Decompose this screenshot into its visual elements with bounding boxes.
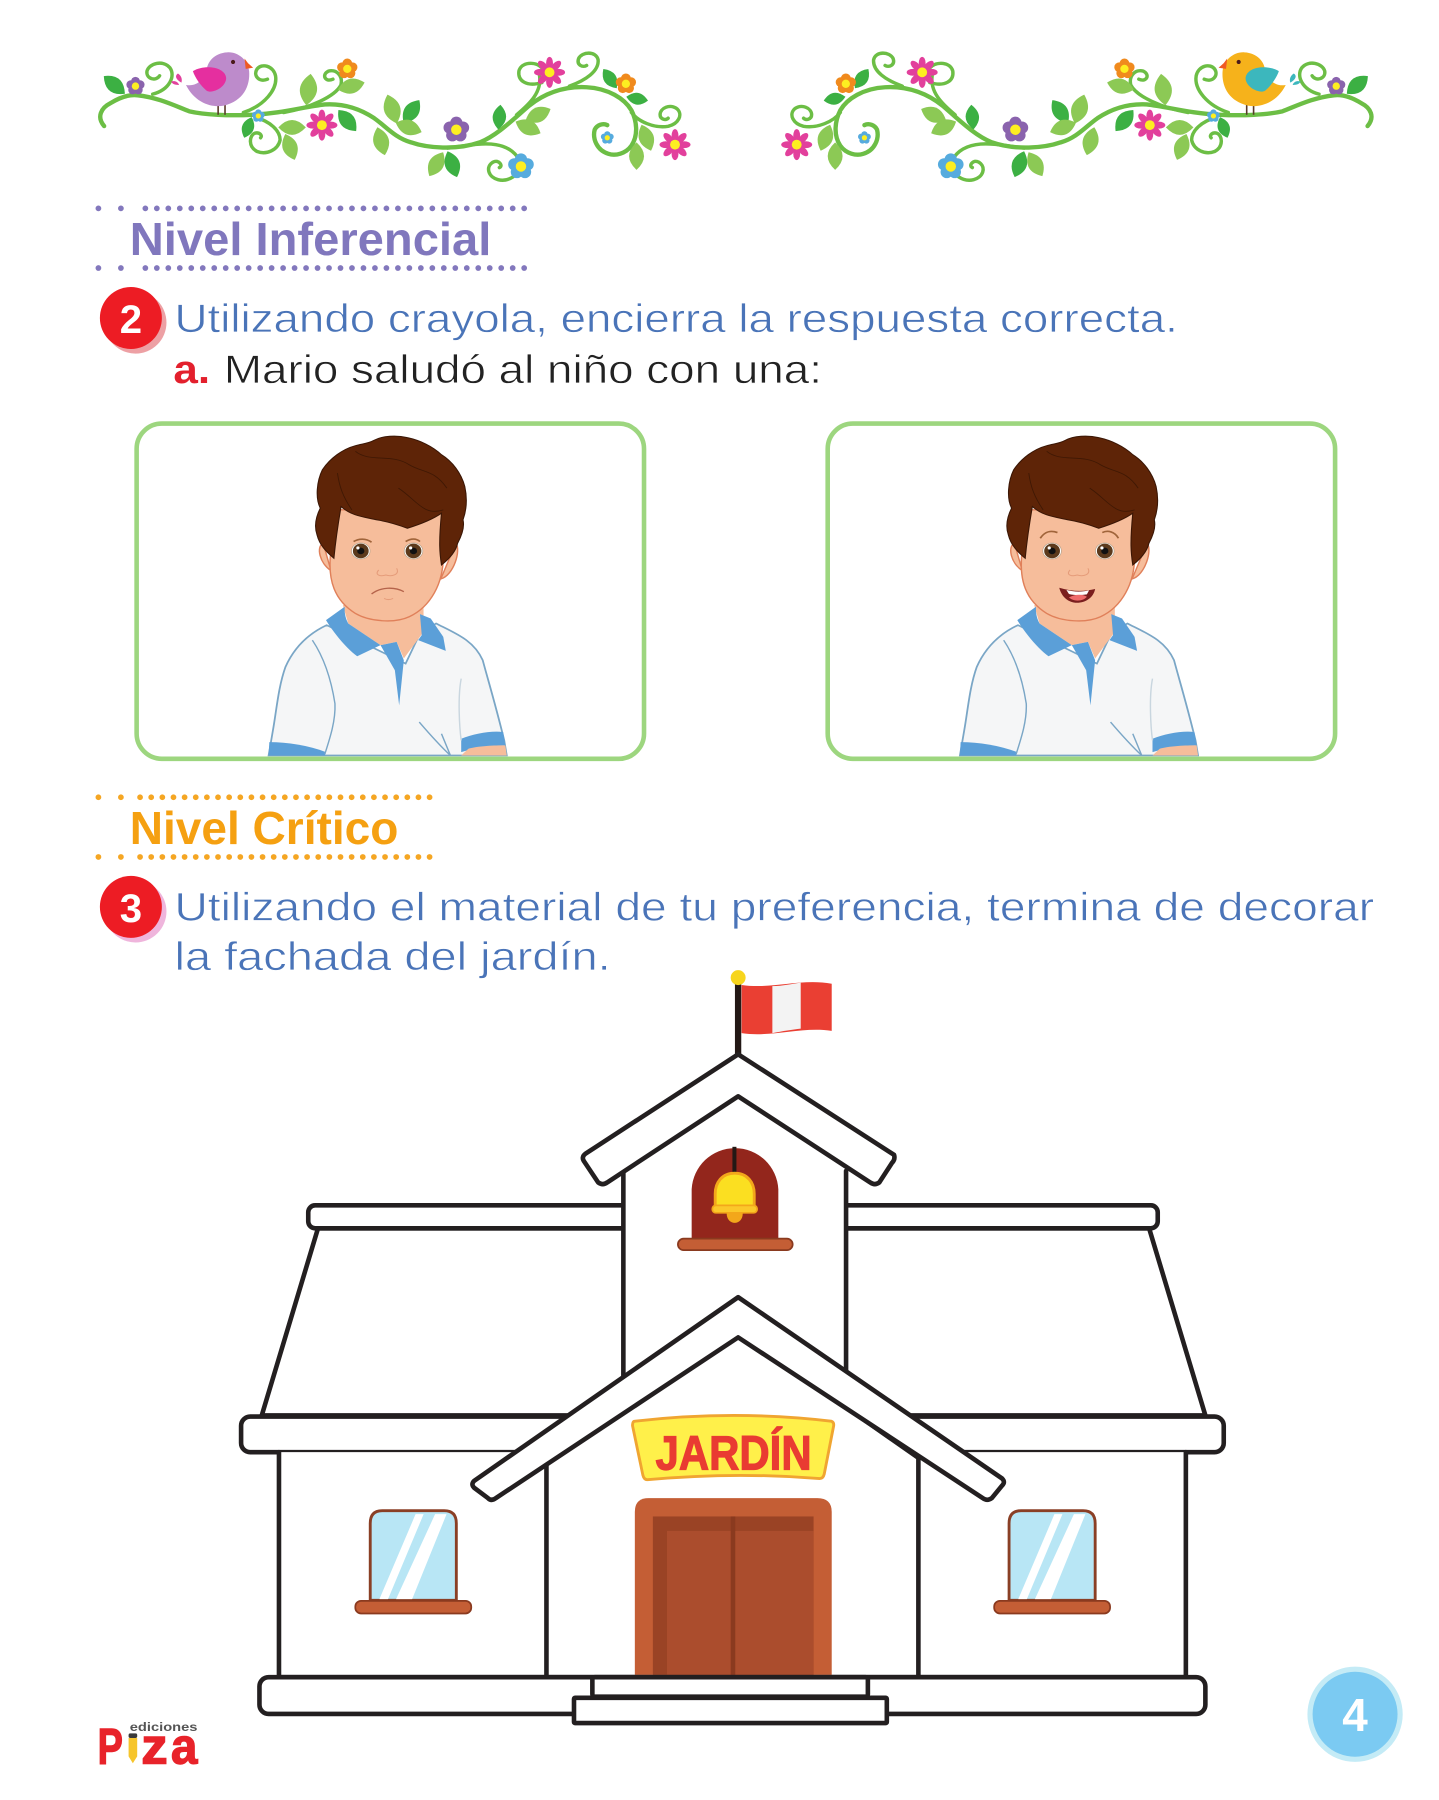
section heading: Nivel Crítico: Nivel Crítico (130, 802, 398, 854)
instruction: question 2: Utilizando crayola, encierra la respuesta correcta. (175, 297, 1178, 341)
badge: number 2: 2 (120, 297, 142, 342)
central facade (546, 1332, 918, 1677)
panel: happy boy option (828, 424, 1335, 759)
base and steps (259, 1677, 1205, 1723)
tower roof (583, 1054, 894, 1184)
logo: ediciones Piza (98, 1717, 198, 1774)
section heading: Nivel Crítico (98, 797, 434, 857)
tower (623, 1148, 846, 1395)
tower walls (623, 1171, 846, 1395)
instruction: question 3: la fachada del jardín. (175, 935, 611, 979)
left window (355, 1511, 471, 1613)
badge: number 2 (100, 287, 166, 354)
instruction: question 3: Utilizando el material de tu preferencia, termina de decorar (175, 886, 1374, 930)
logo: ediciones Piza: ediciones (130, 1720, 198, 1734)
decoration: left floral vine with purple bird (99, 52, 691, 180)
badge: number 3 (100, 876, 166, 942)
bell alcove (678, 1147, 793, 1250)
logo: ediciones Piza: z (141, 1717, 168, 1774)
main gable roof (472, 1297, 1004, 1500)
icon: purple bird (171, 52, 253, 115)
decoration: right floral vine with yellow bird (781, 52, 1373, 180)
right window (994, 1511, 1110, 1613)
lower eave (241, 1417, 1224, 1452)
badge: number 3: 3 (120, 886, 142, 931)
flag (731, 970, 832, 1055)
question a: Mario saludó: Mario saludó al niño con una: (224, 348, 822, 392)
page number badge: 4 (1342, 1689, 1368, 1741)
question a: Mario saludó: a. (173, 348, 210, 392)
instruction: question 3 (175, 886, 1374, 979)
side walls (279, 1452, 1186, 1677)
icon: pencil as letter i (129, 1733, 137, 1763)
illustration: smiling boy (960, 436, 1198, 755)
page number badge (1307, 1667, 1403, 1762)
icon: yellow bird (1219, 52, 1301, 115)
door (635, 1498, 832, 1675)
section heading: Nivel Inferencial: Nivel Inferencial (130, 213, 491, 265)
side roofs (262, 1228, 1205, 1415)
panel: sad boy option (137, 424, 644, 759)
logo: ediciones Piza: a (171, 1717, 198, 1774)
illustration: kindergarten building (241, 970, 1224, 1723)
illustration: sad boy (269, 436, 507, 755)
logo: ediciones Piza: P (98, 1717, 123, 1774)
sign: JARDÍN: JARDÍN (656, 1426, 812, 1480)
